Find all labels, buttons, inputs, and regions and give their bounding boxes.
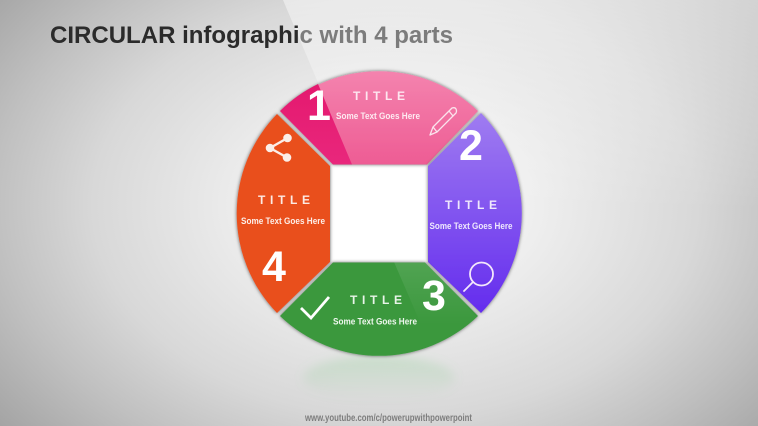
panel: segment 2 purple: [428, 113, 522, 313]
number 4: 4: [262, 243, 286, 291]
center square: [331, 165, 428, 262]
panel: segment 1 pink: [280, 71, 478, 164]
footer url: www.youtube.com/c/powerupwithpowerpoint: [304, 412, 472, 424]
icon: pencil: [430, 108, 456, 135]
icon: magnifier: [464, 262, 493, 291]
segment 1 dark overlap: [280, 84, 352, 164]
number 3: 3: [422, 272, 446, 320]
icon: check mark: [301, 297, 329, 318]
reflection of circle: [303, 356, 455, 400]
segment 3 text: Some Text Goes Here: [333, 316, 417, 326]
segment 1 heading: TITLE: [353, 89, 405, 103]
panel: segment 4 orange: [237, 114, 330, 313]
panel: segment 3 green: [280, 262, 500, 356]
icon: share: [266, 134, 291, 161]
segment 4 text: Some Text Goes Here: [241, 216, 325, 226]
segment 3 heading: TITLE: [350, 293, 402, 307]
number 2: 2: [459, 122, 483, 170]
segment 2 heading: TITLE: [445, 198, 497, 212]
segment 4 heading: TITLE: [258, 193, 310, 207]
segment 1 text: Some Text Goes Here: [336, 111, 420, 121]
segment 3 light overlap: [394, 262, 462, 300]
number 1: 1: [307, 82, 331, 130]
background light band: [283, 0, 758, 210]
segment 2 text: Some Text Goes Here: [430, 221, 512, 231]
title: CIRCULAR infographic with 4 parts: [50, 22, 453, 49]
